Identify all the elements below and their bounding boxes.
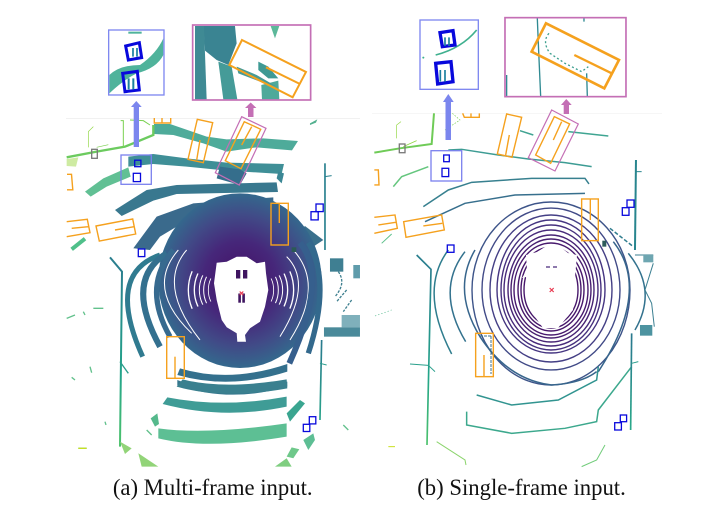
detection boxes: blue pedestrians [133,160,323,431]
caption: single-frame: (b) Single-frame input. [417,475,626,500]
detection boxes: blue pedestrians [442,155,634,430]
highlight box: pink [215,117,266,185]
highlight box: blue [431,151,462,181]
ego vehicle hole [522,245,577,328]
lidar point cloud: far field bands [67,119,332,250]
arrow: pink up [245,102,256,117]
horizon line [66,118,360,119]
panel: multi-frame input [66,25,360,467]
ego marker [240,292,243,295]
detection box: orange lower left [476,333,493,377]
returns inside the hole [546,266,557,268]
caption: multi-frame: (a) Multi-frame input. [113,475,313,500]
inset: blue zoom [109,30,164,95]
horizon line [372,113,662,114]
detection boxes: orange vehicles [67,118,288,378]
lidar point cloud: central scan rings [67,193,360,467]
detection box: grey [92,149,97,158]
inset: pink zoom [193,25,311,100]
arrow: pink up [561,99,572,114]
panel: single-frame input [372,18,662,467]
highlight box: blue [121,155,151,184]
arrow: blue up [131,101,142,147]
ego marker [550,288,554,292]
returns inside the hole [236,270,247,303]
scan rings [472,202,630,385]
detection boxes: orange vehicles [374,113,598,241]
inset: pink zoom [505,18,626,97]
inset: blue zoom [420,20,478,89]
near-field and bottom scan lines [375,241,654,467]
arrow: blue up [443,94,454,140]
car points in orange box [480,336,491,374]
detection box: grey [399,144,405,153]
ego vehicle hole [214,257,268,342]
highlight box: pink [528,110,578,171]
far-field scan lines [374,113,642,250]
